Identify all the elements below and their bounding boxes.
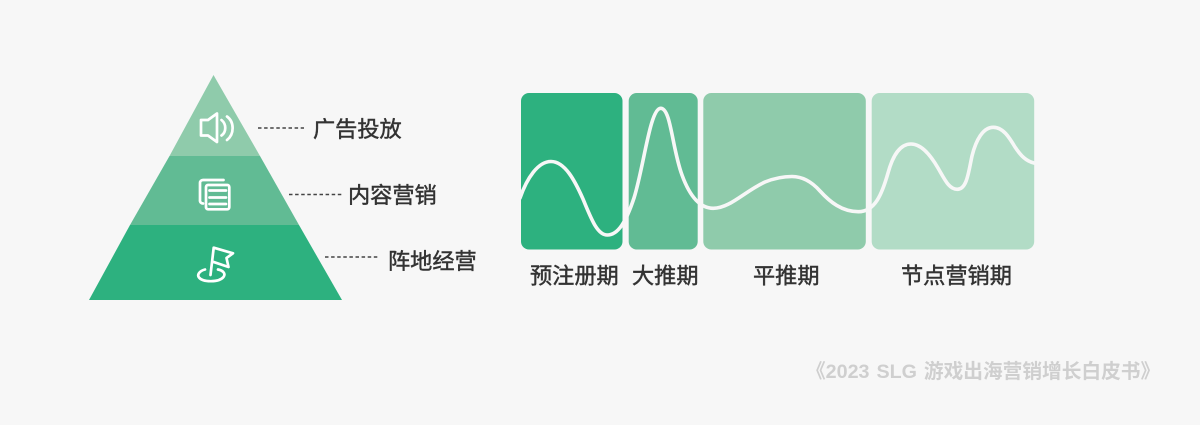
label: ads: 广告投放 xyxy=(313,112,402,144)
source note: 《2023 SLG 游戏出海营销增长白皮书》 xyxy=(806,360,1160,383)
panel: festival marketing xyxy=(872,93,1034,250)
pyramid xyxy=(89,75,342,300)
pyramid tier: bottom xyxy=(89,225,342,300)
stage label: launch push: 大推期 xyxy=(632,258,699,290)
leader line: base xyxy=(325,256,379,258)
pyramid tier: top xyxy=(170,75,260,156)
stage label: steady push: 平推期 xyxy=(753,258,820,290)
stage label: festival marketing: 节点营销期 xyxy=(901,258,1012,290)
panel: pre-registration xyxy=(521,93,622,250)
icon: speaker xyxy=(201,114,233,142)
stage label: pre-registration: 预注册期 xyxy=(530,258,619,290)
icon: documents xyxy=(200,180,229,209)
label: content: 内容营销 xyxy=(348,178,437,210)
label: base: 阵地经营 xyxy=(388,244,477,276)
panel: steady push xyxy=(703,93,866,250)
leader line: ads xyxy=(258,127,304,129)
pyramid tier: middle xyxy=(130,156,299,225)
trend curve xyxy=(520,108,1034,235)
leader line: content xyxy=(289,194,342,196)
panel: launch push xyxy=(629,93,698,250)
icon: flag xyxy=(198,248,233,281)
